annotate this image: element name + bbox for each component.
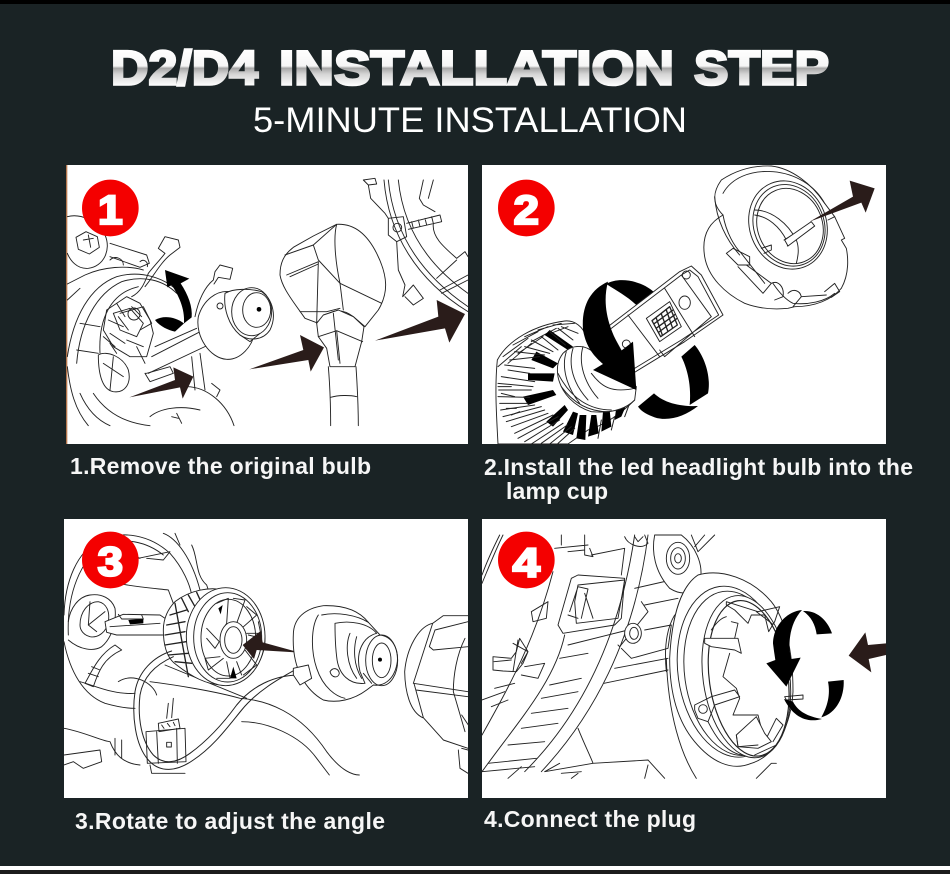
illustration: socket base <box>293 606 398 701</box>
arrow: housing <box>375 300 465 343</box>
illustration: lamp cup ring <box>704 166 848 309</box>
badge 2: 2 <box>514 187 539 233</box>
caption 2: lamp cup <box>506 478 608 504</box>
subtitle: 5-MINUTE INSTALLATION <box>253 101 687 140</box>
arrow: rotate clip <box>155 270 192 332</box>
lower structure <box>545 580 678 778</box>
caption 2: 2.Install the led headlight bulb into the <box>484 454 913 480</box>
illustration: led bulb <box>163 588 265 686</box>
badge 3 <box>82 532 139 588</box>
panel: step 4 connect the plug <box>482 519 886 798</box>
arrow: direction <box>810 181 875 222</box>
badge 4 <box>498 532 555 588</box>
illustration: headlight frame <box>482 535 678 778</box>
caption 4: 4.Connect the plug <box>484 806 696 832</box>
panel: step 2 install the led bulb <box>482 165 886 444</box>
badge 1: 1 <box>98 187 123 233</box>
caption 2 <box>484 454 913 504</box>
illustration: housing behind bulb <box>64 533 468 775</box>
arrow: bulb alignment <box>243 631 300 659</box>
illustration: bulb heatsink fins <box>496 321 636 444</box>
badge 1 <box>82 180 139 236</box>
illustration: headlight housing and bulb <box>67 178 468 426</box>
title: INSTALLATION <box>279 42 674 96</box>
illustration: plug connector <box>146 698 186 763</box>
illustration: adjuster knob <box>653 535 715 593</box>
caption 1: 1.Remove the original bulb <box>70 453 371 479</box>
plug connector <box>280 224 386 426</box>
panel: step 3 rotate to adjust <box>64 519 468 798</box>
badge 4: 4 <box>513 539 540 585</box>
illustration: plug at right <box>405 616 468 748</box>
lamp housing at right <box>363 178 468 312</box>
black rotation arrow back <box>606 280 709 419</box>
title: STEP <box>694 42 829 96</box>
bottom rule <box>0 866 950 870</box>
title: D2/D4 <box>111 42 258 96</box>
illustration: led bulb driver board <box>608 266 723 373</box>
black rotation arrow front <box>583 282 636 390</box>
arrow: pull bulb <box>129 367 193 399</box>
caption 3: 3.Rotate to adjust the angle <box>75 808 385 834</box>
illustration: wire <box>134 651 300 769</box>
title <box>111 42 829 96</box>
arrow: bulb direction <box>849 632 886 672</box>
black rotation arrow <box>766 610 844 720</box>
badge 3: 3 <box>98 539 123 585</box>
arrow: connector <box>249 335 324 372</box>
illustration: lamp socket ring <box>666 573 803 778</box>
panel: step 1 remove the original bulb <box>66 165 468 444</box>
badge 2 <box>498 180 555 236</box>
